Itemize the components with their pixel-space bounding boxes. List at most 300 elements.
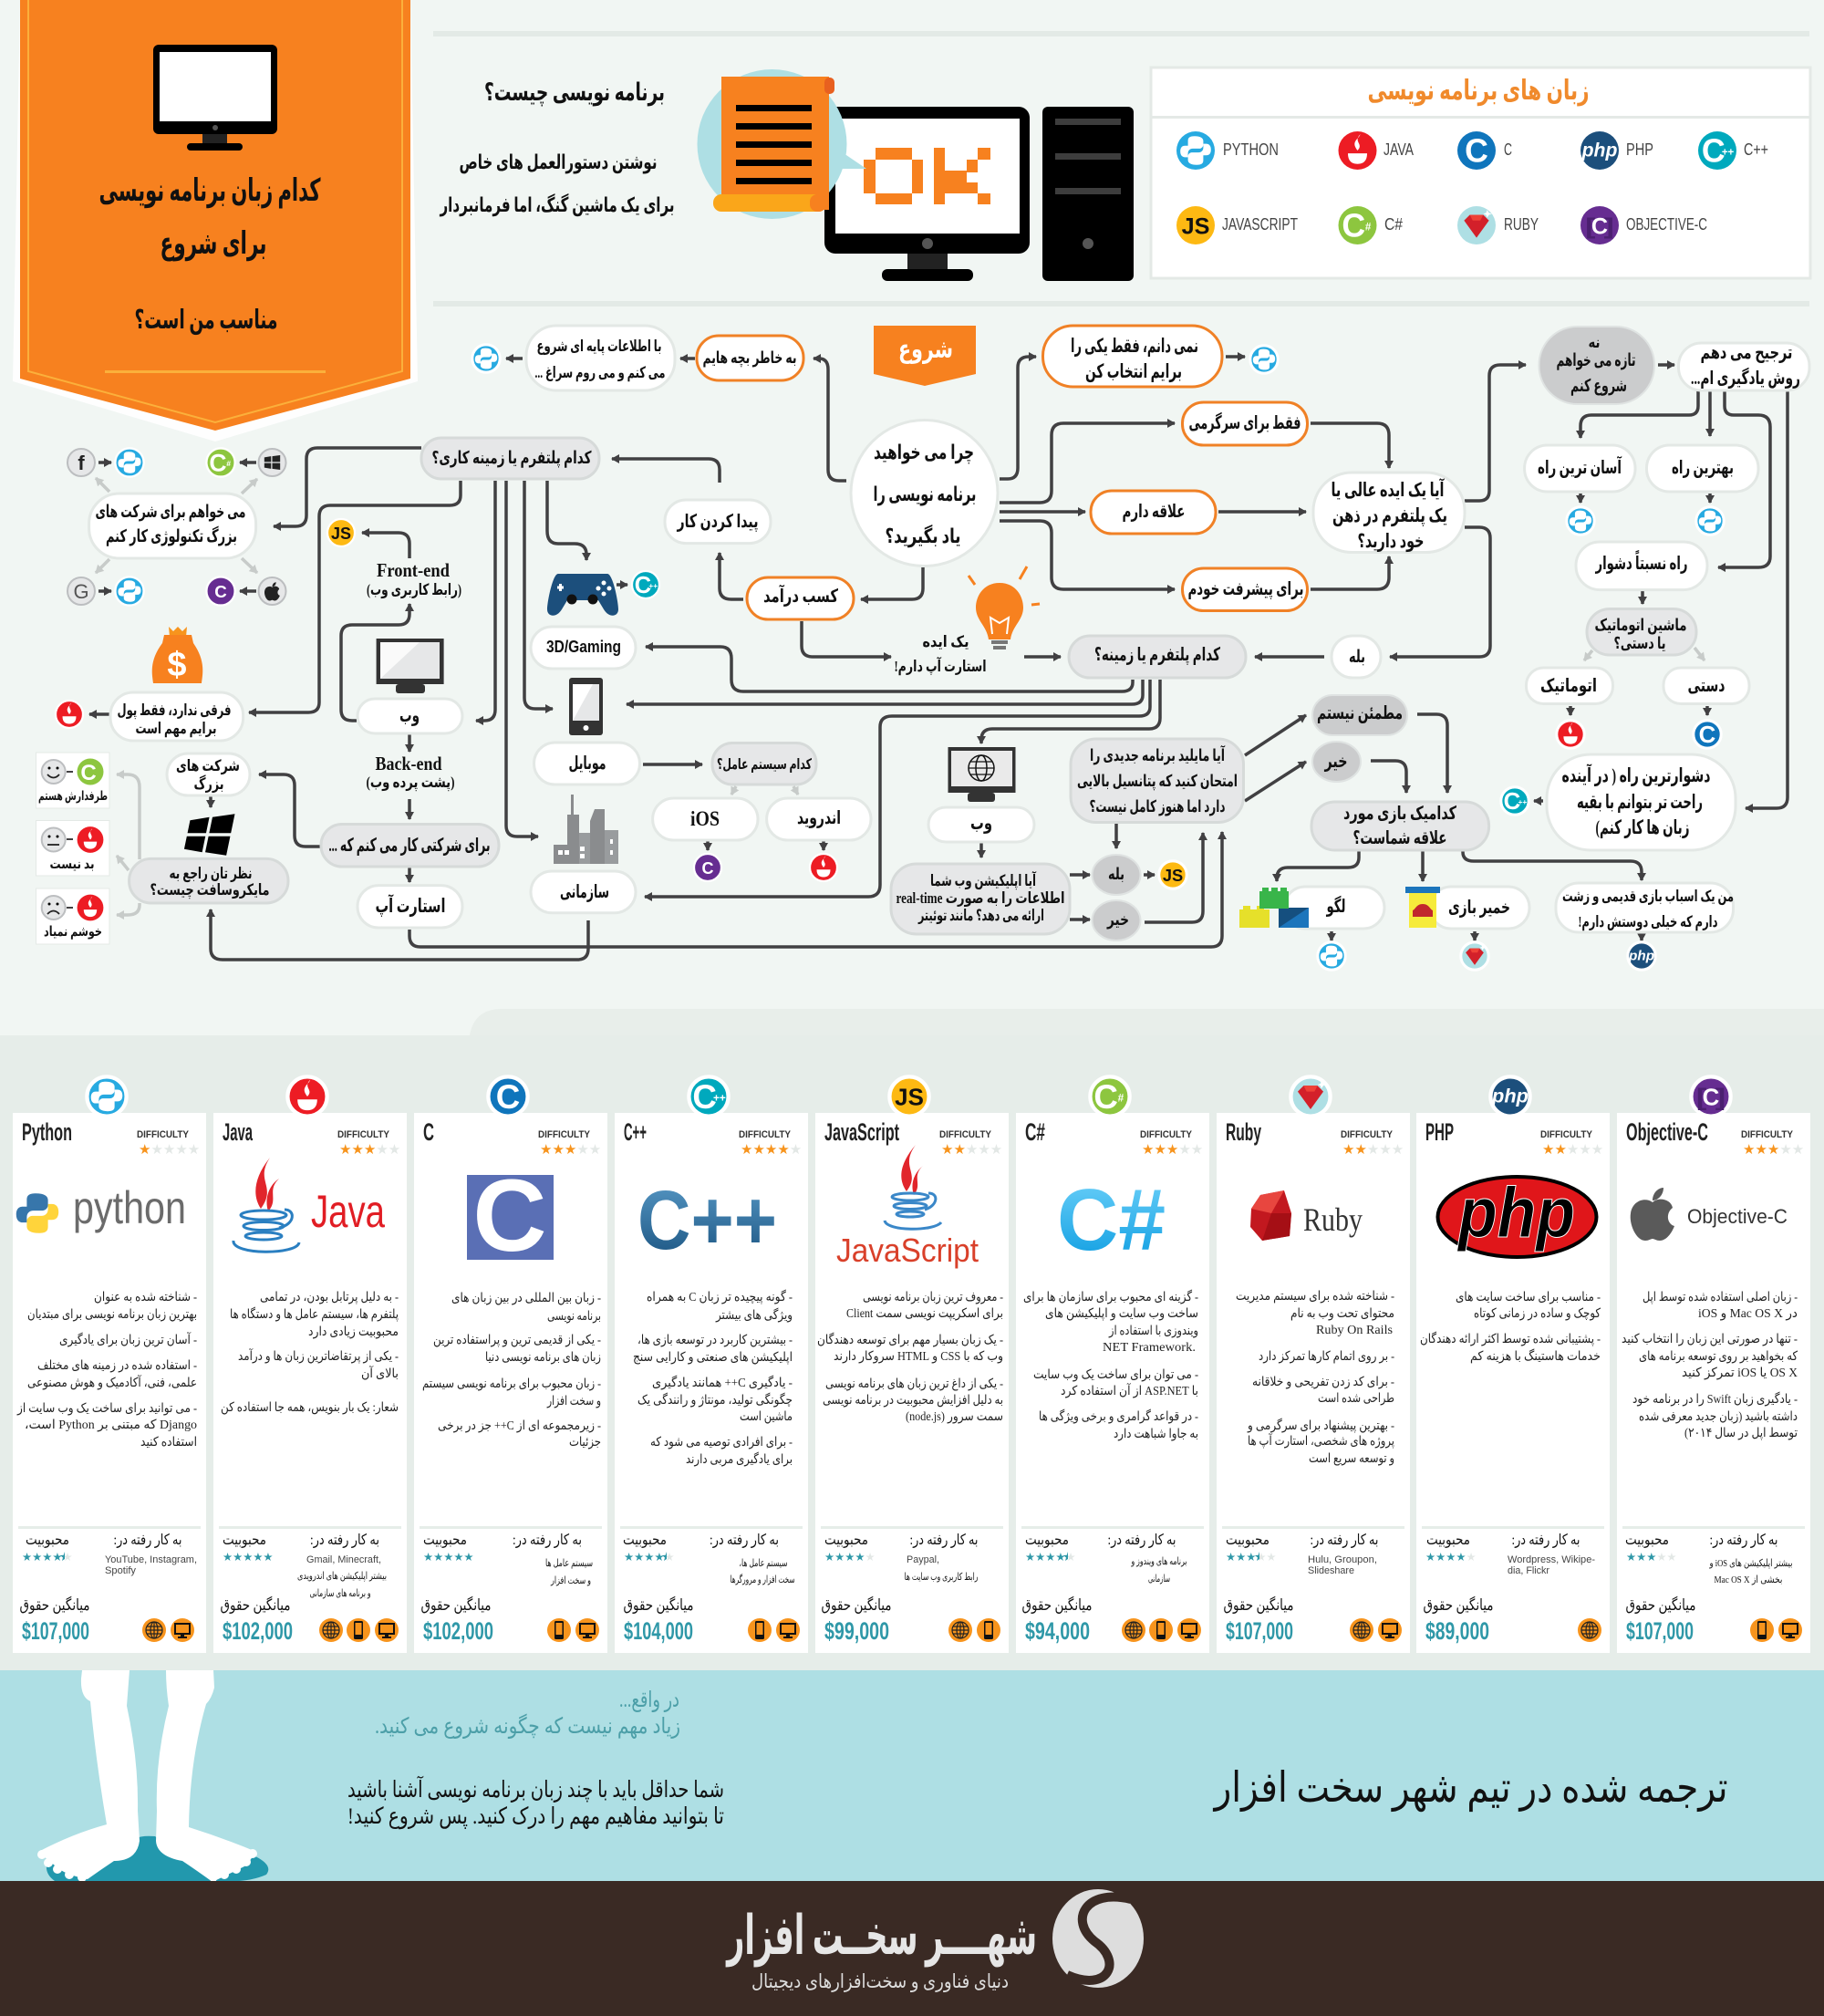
title: [98, 174, 321, 335]
arrow: web to back-end: [408, 734, 411, 752]
arrow: dont know to python: [1226, 355, 1245, 359]
title: مناسب من است؟: [135, 306, 277, 335]
icon: python: [1567, 507, 1594, 535]
node: great idea: خود دارید؟: [1357, 530, 1425, 552]
legend labels: [1222, 140, 1768, 234]
arrow: startup idea to platform: [1024, 655, 1061, 659]
card: c++: - برای افرادی توصیه می شود که: [650, 1436, 793, 1450]
legend labels: OBJECTIVE-C: [1626, 215, 1707, 234]
arrow: game to old toy: [1463, 851, 1642, 880]
node: big companies: بزرگ: [193, 775, 224, 794]
card: php: خدمات هاستینگ با هزینه کم: [1470, 1348, 1601, 1364]
text block: what is programming: نوشتن دستورالعمل های خاص: [460, 151, 657, 174]
card: java: - به دلیل پرتابل بودن، در تمامی: [260, 1291, 399, 1304]
card: c sharp: ساخت وب سایت و اپلیکیشن های: [1045, 1307, 1198, 1321]
card: ruby: DIFFICULTY: [1341, 1129, 1394, 1140]
icon: c++: [1698, 131, 1736, 170]
icon: java: [1557, 721, 1584, 748]
card: python: بهترین زبان برنامه نویسی برای مبتدیان: [27, 1308, 197, 1322]
card: javascript: - یک زبان بسیار مهم برای توسعه دهندگان: [817, 1332, 1003, 1347]
card: ruby: - بر روی اتمام کارها تمرکز دارد: [1259, 1350, 1394, 1364]
card: java: محبوبیت: [223, 1533, 266, 1549]
label: back-end: (پشت پرده وب): [367, 774, 454, 792]
arrow: prefer to best: [1708, 390, 1712, 436]
icon: facebook: f: [78, 452, 85, 474]
icon: java: [56, 701, 83, 728]
arrow: prefer to harder: [1718, 390, 1770, 567]
card: php: محبوبیت: [1426, 1533, 1470, 1549]
card: javascript: محبوبیت: [824, 1533, 868, 1549]
card: php: dia, Flickr: [1508, 1565, 1549, 1576]
arrow: no to new language: [1145, 833, 1203, 922]
node: web 2: [928, 807, 1034, 842]
icon: c sharp: [206, 448, 235, 477]
arrow: automatic to java: [1569, 706, 1572, 715]
card: c++: محبوبیت: [623, 1533, 667, 1549]
node: lego: [1284, 887, 1384, 929]
arrow: platform to web: [981, 680, 1160, 743]
card: python: YouTube, Instagram,: [105, 1554, 197, 1565]
node: new start: تازه می خواهم: [1556, 351, 1636, 370]
card: python: میانگین حقوق: [20, 1595, 89, 1614]
card: javascript: JavaScript: [836, 1231, 979, 1269]
node: company type: برای شرکتی کار می کنم که ...: [328, 836, 491, 856]
node: earn money: کسب درآمد: [763, 584, 838, 607]
arrow: harder to machine: [1641, 591, 1644, 604]
node: real-time app: آیا اپلیکیشن وب شما: [930, 870, 1037, 890]
card: not bad: [36, 821, 109, 876]
node: enterprise: [531, 871, 636, 913]
arrow: basics to python: [506, 357, 523, 360]
node: relatively hard: راه نسبتاً دشوار: [1595, 550, 1687, 574]
icon: php: [1628, 942, 1655, 970]
card: java: - یکی از پرتقاضاترین زبان ها و درآمد: [238, 1348, 399, 1364]
node: for fun: [1182, 402, 1308, 445]
card: c++: - گونه پیچیده تر زبان C به همراه: [647, 1289, 793, 1304]
node: which os: کدام سیستم عامل؟: [717, 757, 812, 773]
legend labels: RUBY: [1504, 215, 1539, 234]
text: startup idea: [894, 633, 987, 676]
card: c++: C++: [624, 1118, 647, 1146]
card: c: به کار رفته در:: [513, 1533, 582, 1549]
node: big tech: بزرگ تکنولوژی کار کنم: [106, 525, 237, 546]
card: python: - می توانید برای ساخت یک وب سایت از: [16, 1402, 197, 1416]
panel: languages legend: [1151, 68, 1810, 278]
card: java: محبوبیت زیادی دارد: [308, 1325, 399, 1339]
node: basics: با اطلاعات پایه ای شروع: [536, 338, 662, 356]
arrow: field to enterprise: [506, 481, 538, 837]
arrow: toy to php: [1640, 933, 1643, 940]
arrow: new language to no: [1245, 762, 1306, 801]
illustration: computer with scroll: [697, 69, 1134, 281]
node: not sure: مطمئن نیستم: [1317, 703, 1403, 723]
node: why learn: برنامه نویسی را: [874, 483, 976, 506]
arrow: controller to c++: [617, 583, 627, 587]
card: objective-c: - یادگیری زبان Swift را در برنامه خود: [1632, 1391, 1798, 1407]
icon: city: [554, 795, 618, 864]
arrow: machine to automatic: [1584, 650, 1592, 660]
card: c++: سخت افزار و مرورگرها: [730, 1574, 795, 1585]
node: self improvement: برای پیشرفت خودم: [1187, 579, 1304, 600]
card: objective-c: ★★★★★: [1743, 1141, 1804, 1158]
card: java: Java: [223, 1118, 254, 1146]
node: microsoft opinion: مایکروسافت چیست؟: [150, 881, 270, 899]
node: lego: لگو: [1326, 895, 1346, 917]
text: advice: شما حداقل باید با چند زبان برنامه نویسی آشنا باشید: [347, 1775, 724, 1803]
arrow: big corp to windows: [209, 796, 212, 807]
node: old toy: دارم که خیلی دوستش دارم!: [1578, 913, 1718, 931]
node: which platform: [1069, 636, 1246, 678]
card: java: [213, 1076, 407, 1653]
node: web: وب: [399, 706, 420, 726]
card: objective-c: بخشی از Mac OS X: [1715, 1574, 1782, 1585]
icon: python: [115, 448, 144, 477]
card: java: ★★★★★: [339, 1141, 400, 1158]
node: find job: [665, 500, 771, 544]
icon: ruby: [1461, 942, 1488, 970]
label: front-end: [367, 559, 461, 599]
arrow: platform to gaming: [646, 647, 1133, 691]
arrow: why to improve: [1000, 521, 1175, 589]
arrow: os to android: [793, 786, 798, 795]
card: ruby: ★★★★★: [1226, 1550, 1277, 1564]
node: yes 2: [1093, 855, 1140, 895]
node: money only: برایم مهم است: [135, 720, 217, 738]
node: easiest way: آسان ترین راه: [1538, 455, 1622, 478]
node: try new language: امتحان کنید که پتانسیل بالایی: [1077, 772, 1238, 791]
card: c sharp: - در قواعد گرامری و برخی ویژگی ها: [1039, 1408, 1198, 1424]
card: c sharp: با ASP.NET از آن استفاده کرد: [1061, 1383, 1198, 1398]
node: why learn: چرا می خواهید: [874, 441, 974, 464]
card: c: [414, 1076, 607, 1653]
node: no 2: [1093, 900, 1140, 940]
arrow: platform to mobile: [627, 680, 1143, 704]
arrow: game to lego: [1277, 851, 1359, 881]
card: javascript: - معروف ترین زبان برنامه نویسی: [863, 1291, 1003, 1304]
arrow: android to java: [822, 841, 825, 850]
arrow: best to python: [1708, 494, 1712, 503]
card: c sharp: ★★★★★: [1142, 1141, 1203, 1158]
card: javascript: ★★★★★: [941, 1141, 1002, 1158]
node: big tech: می خواهم برای شرکت های: [95, 503, 246, 522]
text block: what is programming: برنامه نویسی چیست؟: [484, 78, 665, 107]
card: objective-c: در Mac OS X و iOS: [1698, 1307, 1798, 1321]
node: new start: شروع کنم: [1570, 377, 1627, 396]
card: ruby: Ruby: [1303, 1201, 1363, 1238]
node: real-time app: [891, 864, 1070, 934]
card: c++: [615, 1076, 808, 1653]
card: objective-c: Objective-C: [1687, 1205, 1788, 1228]
card: javascript: Paypal,: [907, 1554, 939, 1565]
card: javascript: به کار رفته در:: [910, 1533, 978, 1549]
icon: c: [1457, 131, 1496, 170]
arrow: idea to yes: [1390, 527, 1490, 657]
arrow: back-end to company: [408, 799, 411, 819]
card: python: - استفاده شده در زمینه های مختلف: [37, 1359, 197, 1373]
card: dislike: [36, 888, 109, 944]
arrow: hardest to c++: [1534, 799, 1543, 803]
node: manual: [1663, 668, 1749, 704]
card: objective-c: که بخواهید بر روی توسعه برنامه های: [1639, 1350, 1798, 1364]
card: c++: $104,000: [624, 1617, 693, 1645]
icon: c sharp: C: [1342, 208, 1365, 244]
node: dont know: نمی دانم، فقط یکی را: [1071, 335, 1198, 357]
icon: c++: C: [1702, 133, 1726, 170]
card: c: - زبان بین المللی در بین زبان های: [451, 1292, 601, 1305]
card: python: python: [73, 1182, 186, 1233]
node: dont know: برایم انتخاب کن: [1085, 360, 1182, 382]
card: java: DIFFICULTY: [337, 1129, 390, 1140]
card: c: میانگین حقوق: [421, 1595, 491, 1614]
icon: game controller: [547, 574, 618, 616]
card: ruby: - بهترین پیشنهاد برای سرگرمی و: [1247, 1418, 1394, 1433]
icon: monitor: [377, 639, 444, 693]
arrow: income to startup idea: [802, 621, 891, 657]
icon: c++: [632, 571, 659, 598]
icon: java: [1339, 131, 1377, 170]
icon: c++: C: [1504, 789, 1520, 815]
card: c sharp: برنامه های ویندوز و: [1131, 1556, 1187, 1567]
node: field or platform: کدام پلتفرم یا زمینه کاری؟: [432, 449, 592, 468]
card: c++: میانگین حقوق: [624, 1595, 693, 1614]
card: ruby: ★★★★★: [1342, 1141, 1404, 1158]
icon: js: JS: [1163, 866, 1183, 885]
node: hardest way: راحت تر بتوانم با بقیه: [1577, 791, 1703, 813]
card: c sharp: میانگین حقوق: [1021, 1595, 1093, 1614]
node: relatively hard: [1576, 542, 1707, 590]
flowchart nodes: [36, 326, 1809, 970]
card: objective-c: [ ]: [1696, 1086, 1726, 1111]
node: big tech: [89, 494, 256, 558]
node: web: [358, 699, 462, 733]
icon: money bag: $: [167, 646, 187, 684]
card: ruby: میانگین حقوق: [1224, 1595, 1293, 1614]
arrow: web to front-end: [341, 604, 409, 721]
card: objective-c: - تنها در صورتی این زبان را انتخاب کنید: [1622, 1333, 1798, 1346]
arrow: field to money: [249, 481, 461, 712]
text: in fact: [375, 1689, 680, 1739]
node: ios: [653, 798, 758, 840]
node: new start: [1539, 327, 1654, 404]
icon: s logo: [1052, 1889, 1144, 1988]
arrow: mobile to os: [643, 763, 702, 766]
card: python: DIFFICULTY: [137, 1129, 190, 1140]
icon: c: C: [1699, 722, 1715, 748]
arrow: tech to windows: [242, 479, 257, 494]
icon: python: [1250, 346, 1278, 373]
arrow: facebook to python: [98, 461, 111, 464]
arrow: tech to facebook: [96, 478, 109, 492]
arrow: prefer to hardest: [1746, 390, 1788, 808]
card: python: $107,000: [22, 1617, 89, 1645]
card: python: Python: [22, 1118, 72, 1146]
card: ruby: محبوبیت: [1226, 1533, 1270, 1549]
card: java: Gmail, Minecraft,: [306, 1554, 381, 1565]
legend labels: C: [1504, 140, 1512, 159]
panel: closing message: [0, 1670, 1824, 1882]
arrow: yes to platform: [1255, 655, 1324, 659]
node: which os: [712, 743, 816, 785]
card: c++: DIFFICULTY: [739, 1129, 792, 1140]
card: ruby: Hulu, Groupon,: [1308, 1554, 1377, 1565]
icon: ruby: [1457, 206, 1496, 244]
legend labels: PHP: [1626, 140, 1653, 159]
node: automatic: [1527, 668, 1612, 704]
card: javascript: وب که با CSS و HTML سروکار دارند: [834, 1350, 1003, 1364]
card: c sharp: .NET Framework: [1103, 1341, 1196, 1355]
icon: js: JS: [331, 525, 351, 543]
card: c++: C: [692, 1078, 717, 1116]
arrow: kids to basics: [680, 357, 695, 360]
arrow: why to fun: [1000, 423, 1175, 503]
card: objective-c: ★★★★★: [1626, 1550, 1677, 1564]
arrow: money to java: [89, 712, 110, 716]
card: c sharp: محبوبیت: [1025, 1533, 1069, 1549]
card: c sharp: DIFFICULTY: [1140, 1129, 1193, 1140]
icon: php: php: [1581, 140, 1618, 161]
card: c: $102,000: [423, 1617, 493, 1645]
node: money only: [110, 692, 244, 741]
card: javascript: میانگین حقوق: [821, 1595, 892, 1614]
icon: objective-c: [ ]: [1585, 213, 1614, 239]
label: front-end: Front-end: [377, 559, 450, 581]
card: c sharp: به جاوا شباهت دارد: [1114, 1428, 1198, 1441]
section: language cards background: [0, 1009, 1824, 1670]
card: c sharp: #: [1118, 1091, 1124, 1104]
node: automatic or manual: [1587, 609, 1696, 655]
card: ruby: Slideshare: [1308, 1565, 1354, 1576]
card: c: - یکی از قدیمی ترین و پراستفاده ترین: [433, 1334, 601, 1347]
icon: php: php: [1628, 949, 1654, 964]
icon: python: [1696, 507, 1724, 535]
arrow: tech to apple: [242, 558, 257, 573]
node: automatic or manual: یا دستی؟: [1614, 634, 1665, 652]
text: translated by: ترجمه شده در تیم شهر سخت افزار: [1213, 1764, 1727, 1813]
node: interested: علاقه دارم: [1122, 502, 1186, 522]
card: objective-c: داشته باشید (زبان جدید معرفی شده: [1639, 1410, 1798, 1424]
icon: c sharp: C: [209, 449, 226, 476]
card: javascript: JavaScript: [824, 1118, 899, 1146]
footer: [0, 1881, 1824, 2016]
node: which game: [1311, 802, 1489, 850]
node: for my kids: به خاطر بچه هایم: [702, 348, 797, 368]
card: java: میانگین حقوق: [221, 1595, 290, 1614]
node: why learn: یاد بگیرید؟: [885, 524, 961, 548]
label: front-end: (رابط کاربری وب): [367, 581, 461, 599]
card: ruby: Ruby On Rails: [1316, 1324, 1393, 1337]
node: earn money: [747, 577, 854, 619]
node: startup: استارت آپ: [376, 894, 445, 917]
legend labels: C++: [1744, 140, 1768, 159]
icon: c++: ++: [1722, 147, 1735, 158]
card: c sharp: C#: [1057, 1171, 1166, 1269]
icon: python: [115, 577, 144, 606]
card: c sharp: سازمانی: [1148, 1574, 1170, 1585]
card: java: بالای آن: [361, 1366, 399, 1381]
card: javascript: به دلیل افزایش محبوبیت در برنامه نویسی: [823, 1394, 1003, 1408]
node: company type: [321, 825, 499, 867]
arrow: field to mobile: [524, 481, 553, 709]
icon: play-doh jar: [1405, 887, 1440, 928]
card: c++: اپلیکیشن های صنعتی و کارایی سنج: [633, 1351, 793, 1365]
card: php: PHP: [1425, 1118, 1454, 1146]
node: which platform: کدام پلتفرم یا زمینه؟: [1094, 645, 1220, 666]
card: c++: ماشین است: [740, 1410, 793, 1424]
card: php: Wordpress, Wikipe-: [1508, 1554, 1595, 1565]
node: not sure: [1312, 695, 1407, 735]
card: python: ★★★★★: [22, 1550, 73, 1564]
title: کدام زبان برنامه نویسی: [98, 174, 321, 209]
card: python: علمی، فنی، آکادمیک و هوش مصنوعی: [27, 1375, 197, 1390]
card: java: Java: [311, 1186, 385, 1237]
arrow: company to big corp: [259, 774, 320, 847]
card: c: محبوبیت: [423, 1533, 467, 1549]
node: microsoft opinion: [130, 858, 288, 903]
icon: python: [1318, 942, 1345, 970]
card: java: شعار: یک بار بنویس، همه جا استفاده کن: [221, 1401, 399, 1415]
icon: c: [1694, 721, 1721, 748]
node: hardest way: زبان ها کار کنم): [1596, 816, 1689, 838]
card: c sharp: C#: [1025, 1118, 1045, 1146]
arrow: front-end to js: [362, 533, 409, 558]
arrow: web to real-time: [979, 842, 983, 857]
icon: c: C: [1465, 133, 1488, 170]
icon: javascript: [1176, 206, 1215, 244]
icon: windows: [259, 449, 286, 476]
text: startup idea: یک ایده: [923, 633, 969, 650]
node: big companies: شرکت های: [176, 757, 240, 775]
arrow: lego to python: [1330, 931, 1333, 940]
card: objective-c: محبوبیت: [1625, 1533, 1669, 1549]
card: objective-c: C: [1703, 1086, 1719, 1111]
icon: windows logo: [183, 814, 234, 856]
arrow: interest to idea: [1218, 510, 1306, 514]
icon: objective-c: [206, 577, 235, 606]
node: old toy: [1556, 883, 1734, 932]
icon: c++: ++: [648, 582, 658, 590]
card: ruby: پروژه های شخصی، استارت آپ ها: [1248, 1433, 1394, 1449]
node: great idea: یک پلتفرم در ذهن: [1332, 504, 1447, 526]
legend labels: C#: [1384, 215, 1403, 234]
arrow: company to startup: [408, 868, 411, 882]
tagline: دنیای فناوری و سخت‌افزارهای دیجیتال: [751, 1970, 1009, 1992]
card: javascript: سمت سرور (node.js): [906, 1410, 1003, 1424]
icon: js: [1159, 861, 1187, 888]
legend labels: JAVA: [1384, 140, 1414, 159]
node: for my kids: [697, 336, 803, 380]
icon: python: [1176, 131, 1215, 170]
card: c: - زیرمجموعه ای از C++ جز در برخی: [438, 1419, 601, 1433]
card: objective-c: [1617, 1076, 1810, 1653]
node: ios: iOS: [690, 807, 720, 830]
icon: google: G: [73, 580, 89, 603]
node: money only: فرقی ندارد، فقط پول: [117, 701, 232, 720]
node: great idea: آیا یک ایده عالی یا: [1332, 478, 1445, 501]
node: why learn: [851, 420, 998, 566]
node: for fun: فقط برای سرگرمی: [1189, 411, 1301, 433]
node: web 2: وب: [970, 814, 992, 834]
node: no 2: خیر: [1106, 910, 1129, 930]
card: python: Django که مبتنی بر Python است،: [25, 1418, 197, 1432]
arrow: new to prefer: [1658, 363, 1674, 367]
card: javascript: ★★★★★: [824, 1550, 876, 1564]
card: objective-c: $107,000: [1626, 1617, 1694, 1645]
card: fan: طرفدارش هستم: [38, 790, 108, 804]
icon: objective-c: C: [1591, 213, 1608, 239]
icon: objective-c: C: [214, 582, 227, 601]
card: objective-c: توسط اپل در سال ۲۰۱۴): [1684, 1427, 1798, 1440]
node: mobile: [534, 743, 640, 785]
